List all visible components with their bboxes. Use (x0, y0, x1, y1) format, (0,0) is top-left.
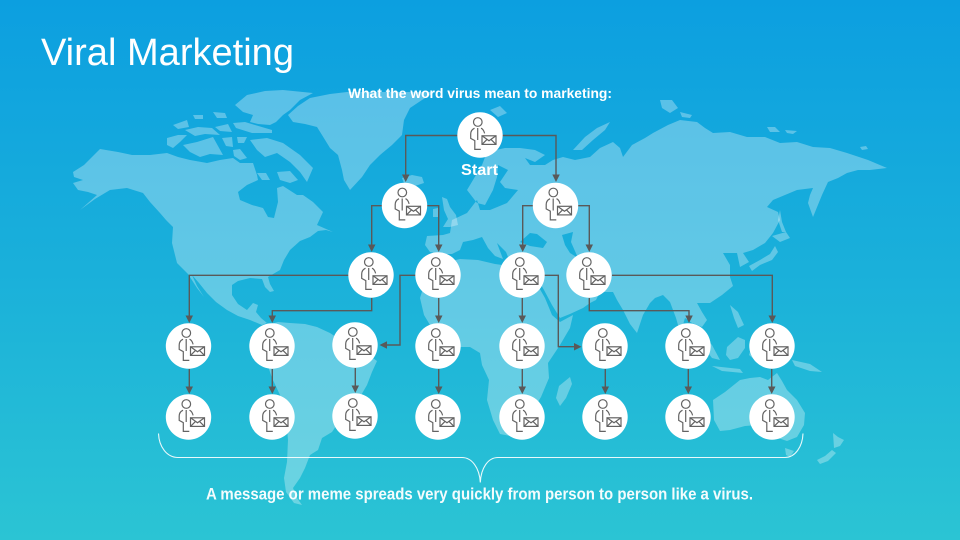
map: Australia (713, 373, 805, 441)
node: level 4 g (665, 394, 711, 440)
arrows: level 2 to level 3 (189, 275, 772, 347)
map: Canadian Arctic islands (167, 112, 313, 183)
title: Viral Marketing (41, 32, 294, 74)
node: level 3 b (249, 323, 295, 369)
map: New Zealand (817, 433, 844, 464)
caption: A message or meme spreads very quickly from person to person like a virus. (206, 484, 753, 503)
node: level 3 h (749, 323, 795, 369)
curly brace (158, 434, 803, 482)
map: Africa (420, 259, 573, 436)
map: Tasmania (785, 448, 794, 457)
map: North America (73, 149, 333, 325)
node: level 3 e (499, 323, 545, 369)
connector arrows (186, 136, 776, 394)
node: level 3 f (582, 323, 628, 369)
node: start (457, 112, 503, 158)
node: level 3 d (415, 323, 461, 369)
map: Eurasia (425, 120, 887, 338)
node: level 4 b (249, 394, 295, 440)
node: level 4 f (582, 394, 628, 440)
map: Japan and Sakhalin (749, 210, 790, 271)
map: Madagascar (556, 377, 572, 406)
nodes: person with envelope (166, 112, 795, 440)
start label: Start (461, 162, 499, 179)
node: level 3 c (332, 322, 378, 368)
arrows: level 3 to level 4 (189, 368, 772, 388)
node: level 1 right (533, 183, 578, 228)
node: level 4 e (499, 394, 545, 440)
map: British Isles (433, 197, 458, 227)
node: level 4 c (332, 393, 378, 439)
arrows: level 1 to level 2 (372, 206, 589, 246)
node: level 2 a (348, 252, 394, 298)
node: level 3 g (665, 323, 711, 369)
map: Greenland (288, 92, 435, 190)
arrowheads (186, 174, 776, 394)
node: level 3 a (166, 323, 211, 369)
node: level 2 c (499, 252, 545, 298)
node: level 4 d (415, 394, 461, 440)
map: Ellesmere Island (235, 90, 313, 125)
node: level 2 b (415, 252, 461, 298)
map: Southeast Asia islands (696, 305, 822, 373)
subtitle: What the word virus mean to marketing: (348, 85, 612, 101)
map: Arctic Eurasian islands (490, 100, 868, 150)
node: level 4 h (749, 394, 795, 440)
arrows: start to level 1 (406, 136, 556, 176)
node: level 4 a (166, 394, 211, 440)
node: level 1 left (382, 183, 427, 228)
node: level 2 d (566, 252, 612, 298)
map: South America (267, 322, 377, 505)
world map (73, 90, 887, 505)
map: Iceland (402, 175, 424, 187)
